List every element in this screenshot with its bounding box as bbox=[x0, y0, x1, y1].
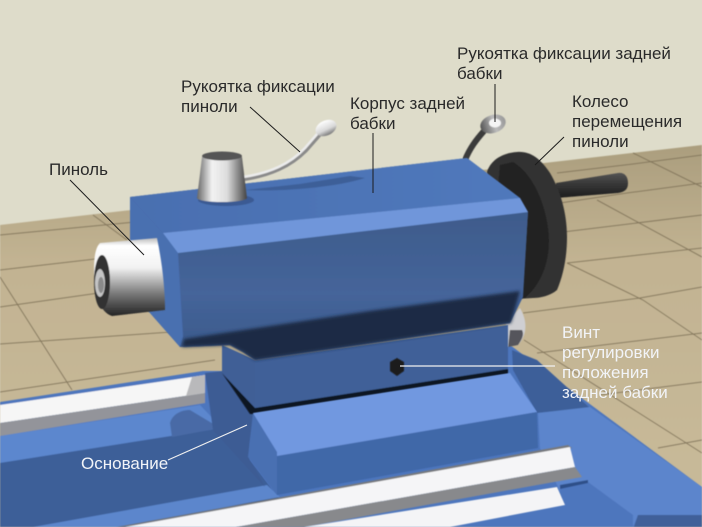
label: adjustment screw: регулировки bbox=[562, 343, 660, 362]
bolt behind pedestal bbox=[506, 308, 525, 347]
leader lines bbox=[70, 84, 564, 460]
bed with rails bbox=[0, 345, 702, 527]
label: quill: Пиноль bbox=[49, 160, 108, 179]
rear clamp lever bbox=[465, 111, 508, 160]
lit bed surface bbox=[0, 405, 222, 463]
label: tailstock clamp handle: бабки bbox=[457, 64, 502, 83]
label: quill wheel: пиноли bbox=[572, 132, 629, 151]
base block bbox=[248, 373, 538, 495]
shadow blob bbox=[170, 410, 220, 437]
label: tailstock body: Корпус задней bbox=[350, 94, 465, 113]
clamp cone and lever bbox=[197, 117, 339, 206]
label: quill wheel: Колесо bbox=[572, 92, 629, 111]
label: adjustment screw: Винт bbox=[562, 323, 600, 342]
wall background bbox=[0, 0, 702, 240]
shadow on top bbox=[245, 176, 365, 190]
handwheel with rear handle bbox=[487, 152, 628, 300]
left rail bbox=[0, 375, 205, 423]
wheel bbox=[487, 152, 567, 300]
lit stripe bottom bbox=[33, 485, 280, 527]
wheel handle bbox=[556, 173, 628, 198]
bed base bbox=[0, 345, 702, 527]
quill bbox=[94, 238, 165, 316]
label: base: Основание bbox=[81, 454, 168, 473]
chamfer bbox=[163, 198, 528, 253]
shaded bed surface bbox=[0, 428, 280, 527]
label: tailstock body: бабки bbox=[350, 114, 395, 133]
right bed, lit part bbox=[538, 407, 702, 527]
front rail bbox=[117, 445, 582, 527]
right bed, shaded part bbox=[512, 350, 590, 413]
label: adjustment screw: положения bbox=[562, 363, 649, 382]
underside shadow bbox=[182, 291, 520, 360]
tailstock pedestal bbox=[222, 325, 508, 414]
label: adjustment screw: задней бабки bbox=[562, 383, 668, 402]
label: quill clamp handle: пиноли bbox=[181, 97, 238, 116]
top face bbox=[130, 158, 520, 233]
floor with tiles bbox=[0, 145, 702, 527]
pedestal rear block bbox=[205, 371, 265, 487]
adjustment screw bbox=[390, 358, 404, 376]
tailstock body bbox=[130, 158, 528, 360]
side face bbox=[178, 212, 528, 360]
label: quill clamp handle: Рукоятка фиксации bbox=[181, 77, 335, 96]
label: tailstock clamp handle: Рукоятка фиксации задней bbox=[457, 44, 671, 63]
silhouette bbox=[130, 158, 528, 360]
front face bbox=[130, 197, 183, 347]
label: quill wheel: перемещения bbox=[572, 112, 682, 131]
